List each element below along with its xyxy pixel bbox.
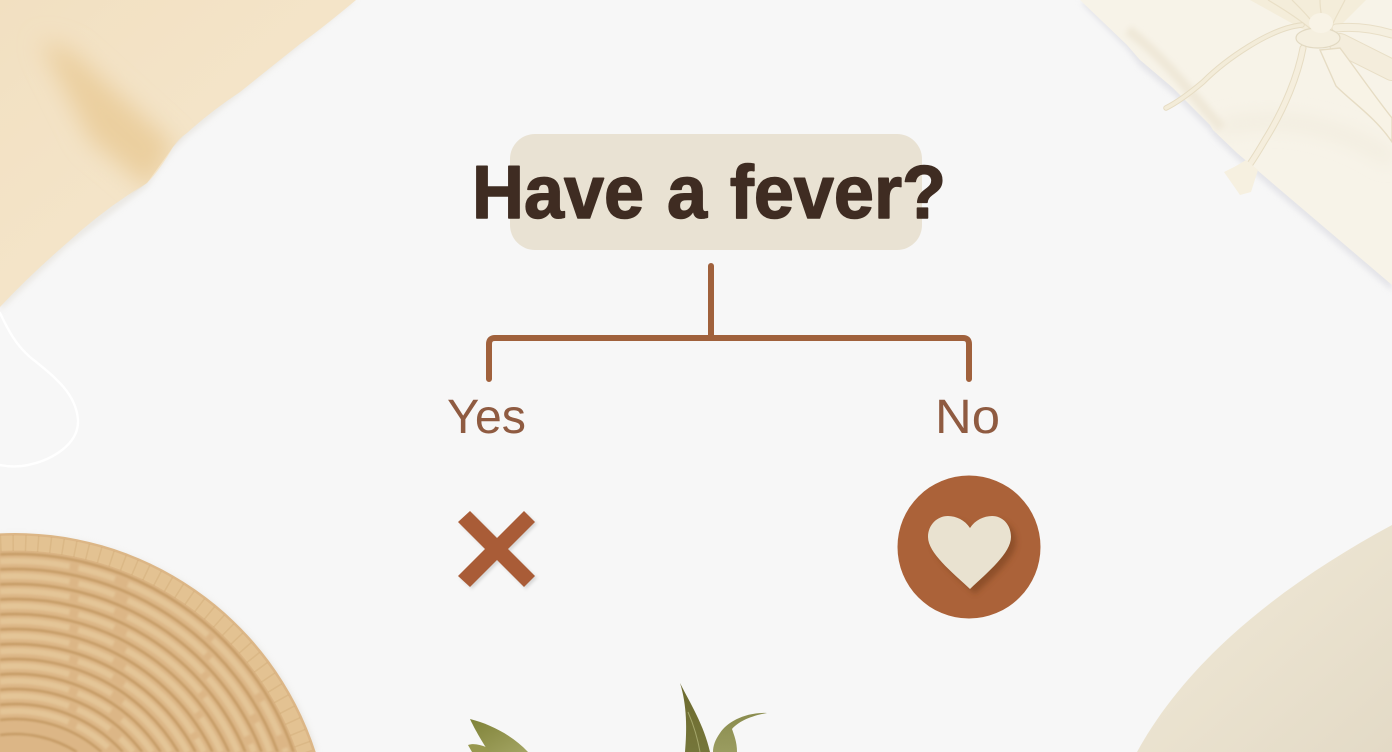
rope rim grain: [0, 543, 305, 752]
long strand: [1320, 48, 1392, 142]
decoration: peach fabric, top left: [0, 0, 356, 311]
rings: [0, 554, 294, 752]
decoration: white string, left: [0, 313, 78, 466]
right leaf: [713, 713, 767, 752]
decoration: cream round cloth, bottom right: [1137, 525, 1392, 752]
label: Yes: Yes: [447, 391, 526, 444]
left leaf: [470, 719, 528, 752]
icon: heart in circle: [898, 476, 1040, 618]
knot: [1296, 28, 1340, 48]
thin cords: [1166, 25, 1303, 172]
decoration: cream fabric with knot, top right: [1080, 0, 1392, 291]
question box: [510, 134, 922, 250]
decoration: woven wooden plate, bottom left: [0, 533, 317, 752]
title: Have a fever?: [472, 150, 946, 234]
icon: cross: [458, 511, 537, 589]
centre leaf: [680, 683, 710, 752]
tassel: [1224, 160, 1258, 195]
label: No: No: [935, 391, 1000, 444]
connector: branching tree: [489, 266, 969, 379]
knot fan and strands: [1250, 0, 1366, 30]
decoration: green leaves, bottom: [468, 683, 767, 752]
